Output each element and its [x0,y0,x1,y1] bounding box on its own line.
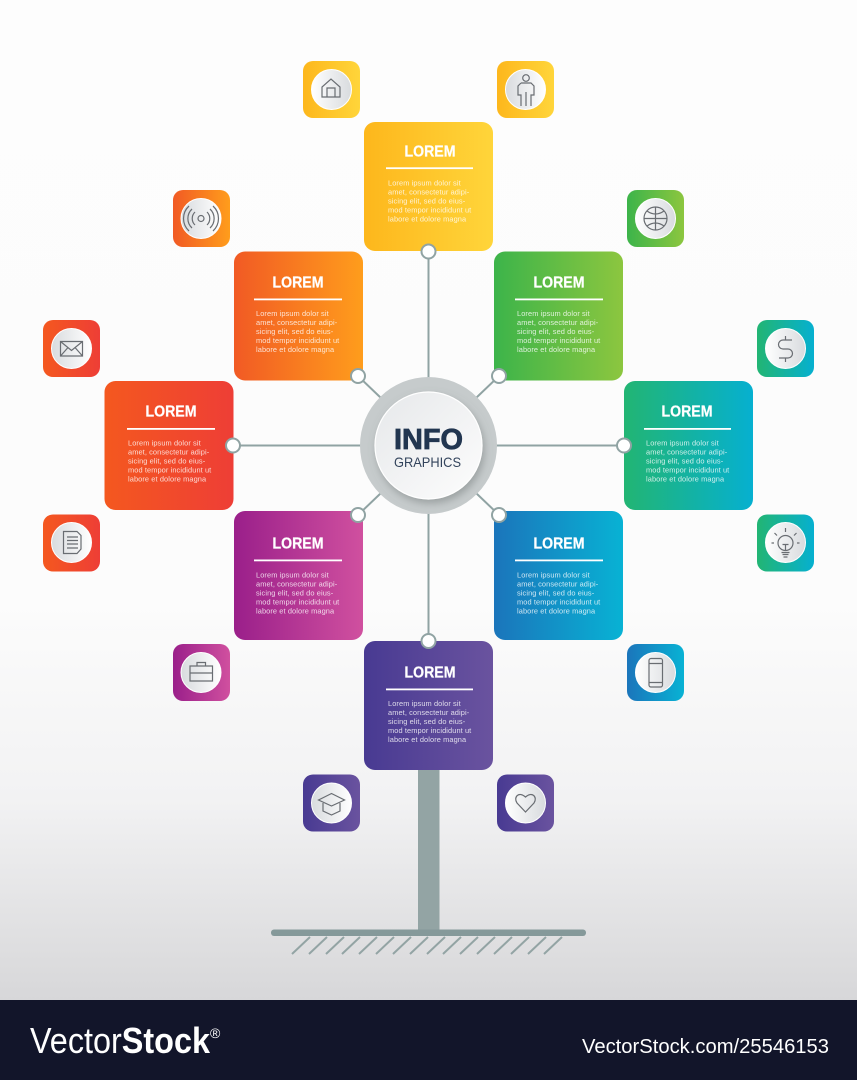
panel: top yellow [364,122,493,251]
panel: bottom indigo: LOREM [404,665,456,682]
panel: red [104,381,234,510]
connector knobs [226,244,631,648]
footer bar [0,1000,857,1080]
panel: teal [624,381,753,510]
panel: purple: sicing elit, sed do eius- [256,588,334,598]
icon: wireless signal [173,190,230,247]
icon: briefcase [173,644,230,701]
footer image id: VectorStock.com/25546153 [582,1036,829,1058]
panel: teal: sicing elit, sed do eius- [646,456,724,466]
panel: orange [234,252,363,380]
panel: teal: amet, consectetur adipi- [646,448,728,456]
panel: orange: mod tempor incididunt ut [256,336,339,345]
panel: top yellow: labore et dolore magna [388,214,467,223]
panel: blue: LOREM [534,536,584,553]
panel: green: Lorem ipsum dolor sit [517,309,590,318]
panel: teal: labore et dolore magna [646,474,725,484]
icon: graduation cap [303,774,360,832]
panel: orange: sicing elit, sed do eius- [256,327,334,336]
panel: blue: amet, consectetur adipi- [517,580,599,588]
footer trademark: ® [210,1025,221,1041]
panel: blue: sicing elit, sed do eius- [517,588,595,598]
central hub: INFO [394,424,463,456]
icon: house [303,61,360,118]
panel: blue: Lorem ipsum dolor sit [517,570,590,580]
panel: orange: labore et dolore magna [256,345,335,354]
icon: envelope [43,320,100,377]
panel: top yellow: Lorem ipsum dolor sit [388,178,461,187]
panel: bottom indigo: labore et dolore magna [388,735,467,744]
icon: document [43,514,100,572]
icon: basketball [627,190,684,247]
panel: purple: Lorem ipsum dolor sit [256,570,329,580]
icon: smartphone [627,644,684,701]
panel: red: amet, consectetur adipi- [128,448,210,456]
panel: bottom indigo: amet, consectetur adipi- [388,708,470,717]
central hub [360,377,497,514]
panel: bottom indigo: sicing elit, sed do eius- [388,717,466,726]
panel: top yellow: sicing elit, sed do eius- [388,196,466,205]
panel: red: sicing elit, sed do eius- [128,456,206,466]
panel: bottom indigo: mod tempor incididunt ut [388,726,471,735]
panel: green: LOREM [534,275,584,292]
panel: bottom indigo [364,641,493,770]
icon: person [497,61,554,118]
icon: heart [497,774,554,832]
panel: red: LOREM [146,404,196,421]
panel: red: mod tempor incididunt ut [128,466,211,474]
icon: lightbulb [757,514,814,572]
panel: teal: Lorem ipsum dolor sit [646,438,719,448]
panel: red: Lorem ipsum dolor sit [128,438,201,448]
panel: top yellow: mod tempor incididunt ut [388,205,471,214]
panel: purple: LOREM [272,536,324,553]
panel: blue: labore et dolore magna [517,606,596,616]
panel: red: labore et dolore magna [128,474,207,484]
panel: orange: LOREM [272,275,324,292]
panel: green: mod tempor incididunt ut [517,336,600,345]
panel: orange: amet, consectetur adipi- [256,318,338,327]
icon: dollar [757,320,814,377]
trunk and ground [271,770,586,954]
panel: purple [234,511,363,640]
panel: green: amet, consectetur adipi- [517,318,599,327]
footer logo: VectorStock [30,1020,211,1061]
panel: top yellow: amet, consectetur adipi- [388,187,470,196]
panel: orange: Lorem ipsum dolor sit [256,309,329,318]
panel: teal: mod tempor incididunt ut [646,466,729,474]
panel: bottom indigo: Lorem ipsum dolor sit [388,699,461,708]
panel: blue [494,511,623,640]
panel: purple: labore et dolore magna [256,606,335,616]
panel: purple: amet, consectetur adipi- [256,580,338,588]
connector lines [233,251,624,641]
panel: purple: mod tempor incididunt ut [256,598,339,606]
panel: teal: LOREM [662,404,712,421]
central hub: GRAPHICS [394,454,461,470]
panel: green: labore et dolore magna [517,345,596,354]
panel: green [494,252,623,380]
panel: top yellow: LOREM [404,144,456,161]
panel: blue: mod tempor incididunt ut [517,598,600,606]
panel: green: sicing elit, sed do eius- [517,327,595,336]
